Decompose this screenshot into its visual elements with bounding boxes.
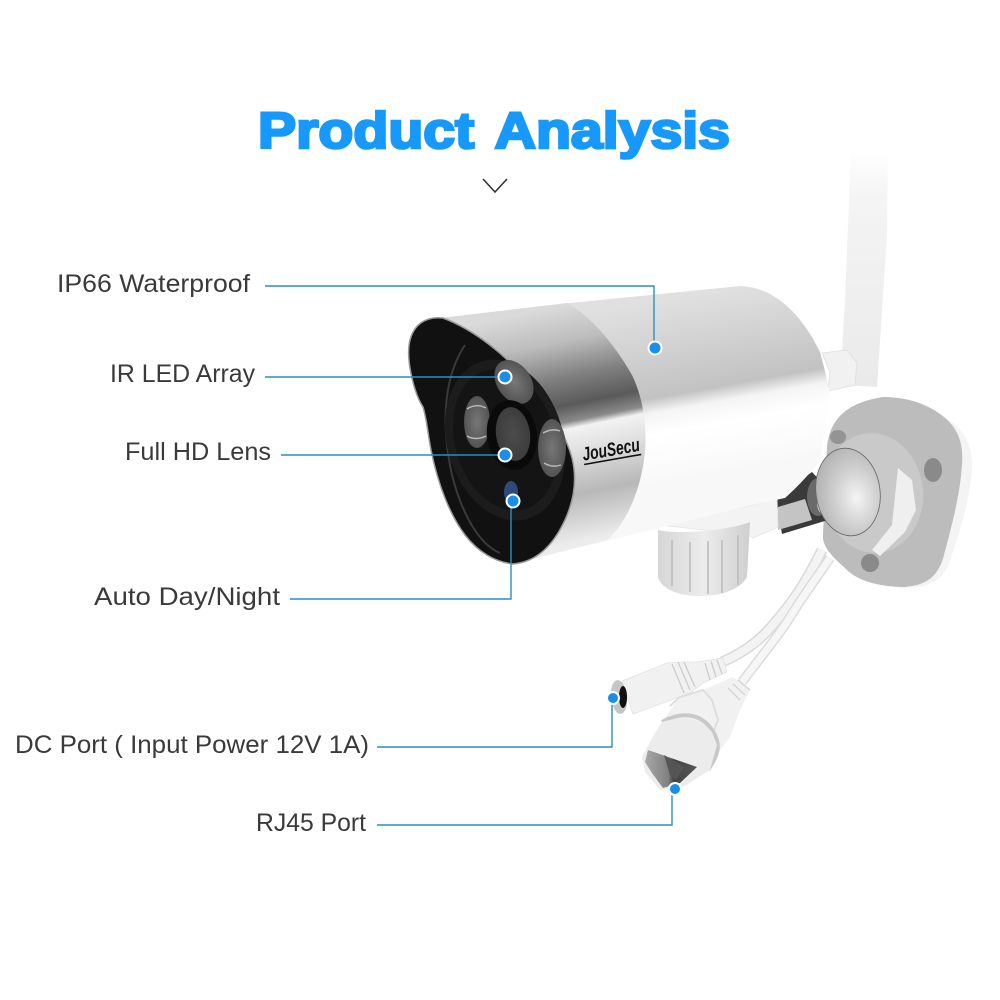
callout: RJ45 Port: RJ45 Port xyxy=(256,809,366,837)
callout: IR LED Array xyxy=(110,360,512,388)
callout: Full HD Lens: Full HD Lens xyxy=(125,438,271,466)
callout: IR LED Array: IR LED Array xyxy=(110,360,255,388)
brand logo: JouSecu xyxy=(581,435,642,466)
swivel ball xyxy=(810,444,886,540)
callout: RJ45 Port xyxy=(256,783,681,837)
brand logo xyxy=(581,435,642,466)
callout: Full HD Lens xyxy=(125,438,512,466)
bottom bracket xyxy=(660,498,778,538)
cables xyxy=(722,550,830,682)
callout: Auto Day/Night: Auto Day/Night xyxy=(94,583,280,611)
light sensor xyxy=(504,481,518,503)
callout: DC Port: DC Port ( Input Power 12V 1A) xyxy=(15,731,369,759)
callout: Auto Day/Night xyxy=(94,494,520,611)
screw nut xyxy=(658,522,750,596)
icon: chevron down xyxy=(483,179,507,192)
IR LED top xyxy=(486,353,542,411)
DC connector xyxy=(609,658,727,715)
swivel neck xyxy=(776,472,838,534)
IR LED right xyxy=(538,419,566,477)
camera illustration xyxy=(409,150,972,790)
camera front hood xyxy=(409,318,583,564)
callout: IP66 Waterproof: IP66 Waterproof xyxy=(57,270,250,298)
callout: DC Port xyxy=(15,692,619,759)
IR LED left xyxy=(464,396,490,448)
lens xyxy=(482,397,542,473)
callout: IP66 Waterproof xyxy=(57,270,662,354)
antenna xyxy=(822,150,888,391)
RJ45 connector xyxy=(642,677,750,790)
title: Product Analysis xyxy=(258,102,730,159)
camera body xyxy=(560,286,830,545)
wall mount plate xyxy=(817,397,972,588)
metal band xyxy=(440,303,645,564)
